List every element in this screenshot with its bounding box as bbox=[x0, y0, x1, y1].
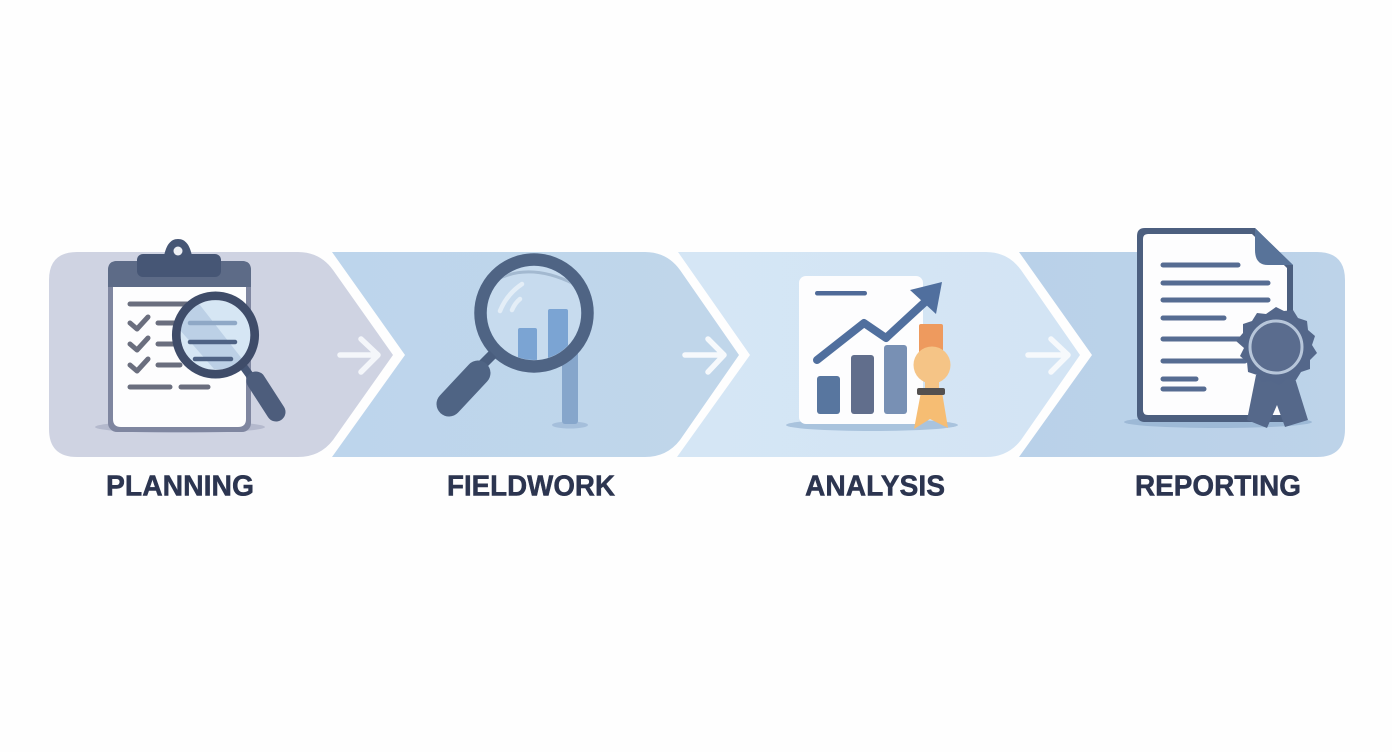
icon: clipboard with magnifier bbox=[95, 239, 276, 433]
label: reporting: REPORTING bbox=[1135, 470, 1301, 502]
arrow: planning to fieldwork bbox=[340, 339, 378, 372]
chevron: analysis bbox=[677, 252, 1080, 457]
panel: reporting bbox=[1019, 228, 1345, 457]
panel: analysis bbox=[677, 252, 1080, 457]
label: fieldwork: FIELDWORK bbox=[447, 470, 615, 502]
panel: planning bbox=[49, 239, 393, 457]
icon: document with seal bbox=[1124, 228, 1317, 428]
chevron: reporting bbox=[1019, 252, 1345, 457]
arrow: fieldwork to analysis bbox=[685, 339, 724, 372]
chevron: planning bbox=[49, 252, 393, 457]
process infographic bbox=[49, 228, 1345, 496]
icon: magnifier over bars bbox=[449, 260, 588, 428]
arrow: analysis to reporting bbox=[1028, 339, 1068, 372]
icon: chart card with ribbon bbox=[786, 276, 958, 431]
label: planning: PLANNING bbox=[106, 470, 254, 502]
chevron: fieldwork bbox=[332, 252, 739, 457]
panel: fieldwork bbox=[332, 252, 739, 457]
label: analysis: ANALYSIS bbox=[805, 470, 945, 502]
